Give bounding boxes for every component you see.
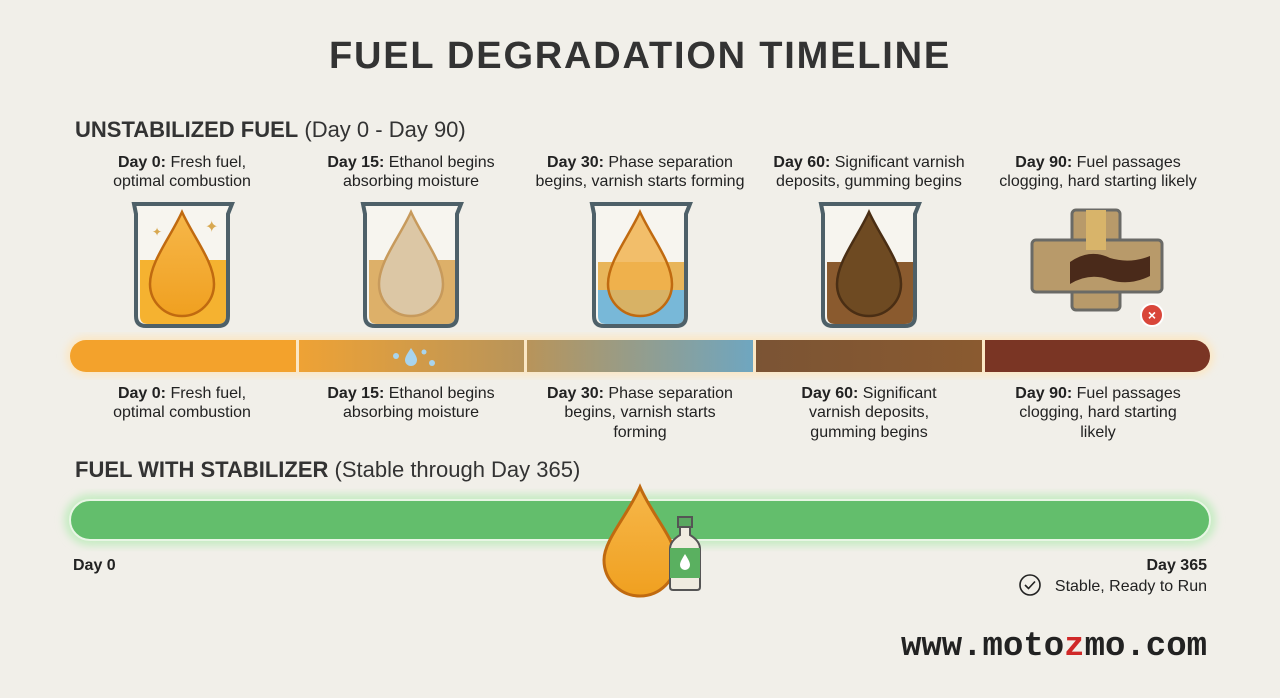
bottom labels: Day 60: Significant (801, 385, 937, 402)
bottom labels: Day 0: Fresh fuel, (118, 385, 246, 402)
label: day 0: Day 0 (73, 557, 116, 574)
bottom labels: gumming begins (810, 424, 928, 441)
bottom labels: optimal combustion (113, 404, 251, 421)
heading: fuel with stabilizer: FUEL WITH STABILIZER (Stable through Day 365) (75, 457, 580, 482)
beaker: day 0: ✦ (152, 225, 162, 239)
icon: clogged fuel passage: × (1148, 307, 1156, 323)
top labels: Day 30: Phase separation (547, 154, 733, 171)
top labels: clogging, hard starting likely (999, 173, 1197, 190)
bottom labels: varnish deposits, (809, 404, 929, 421)
top labels: begins, varnish starts forming (536, 173, 744, 190)
bottom labels (113, 385, 1181, 441)
status: stable ready to run: Stable, Ready to Run (1055, 578, 1207, 595)
icon: clogged fuel passage (1032, 210, 1163, 326)
bottom labels: absorbing moisture (343, 404, 479, 421)
bottom labels: clogging, hard starting (1019, 404, 1177, 421)
timeline bar: unstabilized (66, 336, 1214, 376)
bottom labels: forming (613, 424, 667, 441)
top labels: Day 15: Ethanol begins (327, 154, 495, 171)
icon: fuel drop with stabilizer bottle (604, 487, 700, 596)
label: day 365: Day 365 (1146, 557, 1207, 574)
bottom labels: Day 15: Ethanol begins (327, 385, 495, 402)
beaker: day 0: ✦ (205, 219, 218, 236)
bottom labels: Day 30: Phase separation (547, 385, 733, 402)
top labels: deposits, gumming begins (776, 173, 962, 190)
bottom labels: Day 90: Fuel passages (1015, 385, 1181, 402)
title: FUEL DEGRADATION TIMELINE (329, 35, 951, 77)
top labels (113, 154, 1197, 190)
green bar (64, 494, 1216, 546)
top labels: Day 0: Fresh fuel, (118, 154, 246, 171)
beaker: day 30 (592, 204, 690, 326)
top labels: Day 60: Significant varnish (773, 154, 965, 171)
status: stable ready to run (1020, 575, 1207, 595)
website url: www.motozmo.com (901, 628, 1207, 666)
beaker: day 0 (134, 204, 232, 326)
top labels: absorbing moisture (343, 173, 479, 190)
top labels: optimal combustion (113, 173, 251, 190)
beaker: day 60 (821, 204, 919, 326)
heading: unstabilized fuel: UNSTABILIZED FUEL (Day 0 - Day 90) (75, 117, 466, 142)
bottom labels: likely (1080, 424, 1116, 441)
beaker: day 15 (363, 204, 461, 326)
top labels: Day 90: Fuel passages (1015, 154, 1181, 171)
bottom labels: begins, varnish starts (564, 404, 716, 421)
